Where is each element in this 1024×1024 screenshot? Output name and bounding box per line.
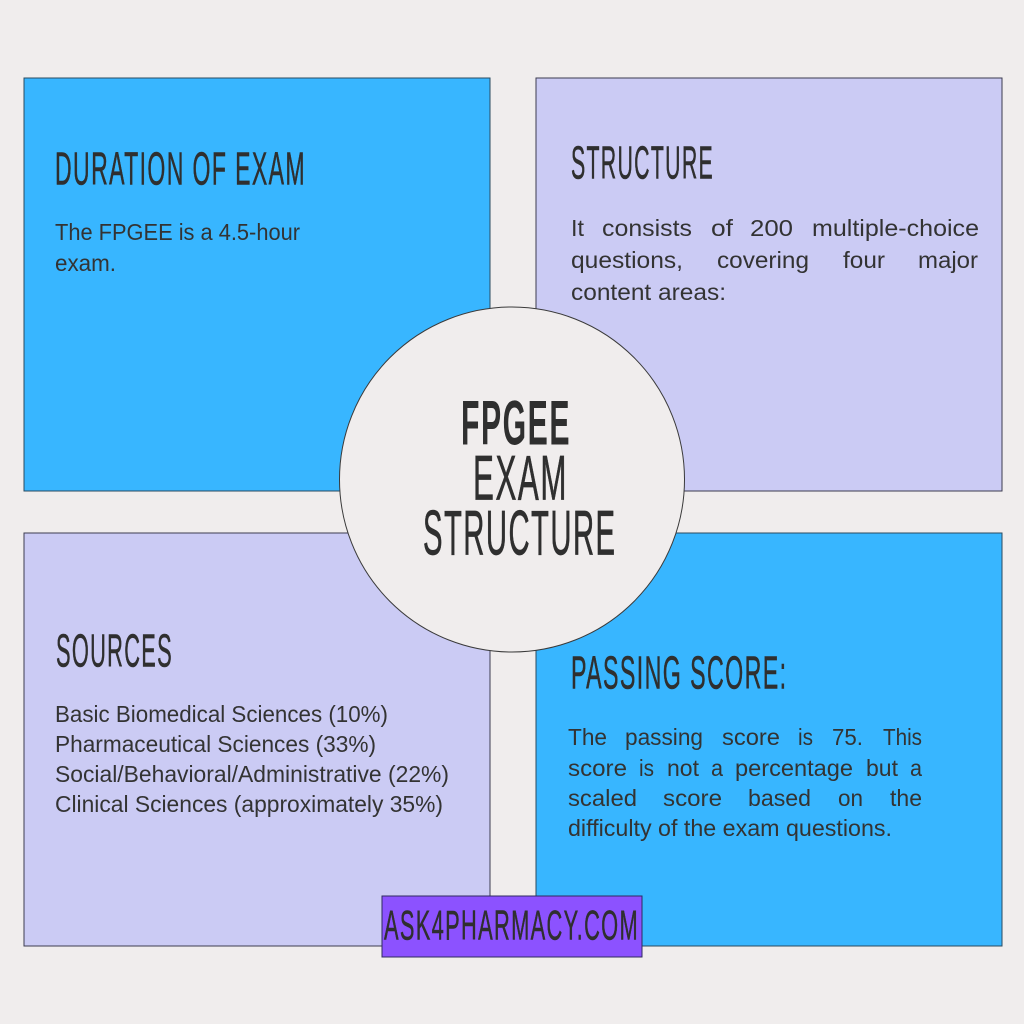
text: sources list: Basic Biomedical Sciences (10%) — [55, 701, 388, 727]
panel: duration of exam — [24, 78, 490, 491]
text: structure body: 200 — [750, 215, 793, 241]
text: passing score body: score — [722, 724, 780, 750]
text: passing score body: score — [568, 755, 627, 781]
text: structure body: questions, — [571, 247, 683, 273]
text: passing score body: not — [667, 755, 699, 781]
panel: passing score — [536, 533, 1002, 946]
text: passing score body: on — [838, 785, 863, 811]
text: passing score body: but — [866, 755, 898, 781]
text: passing score body: scaled — [568, 785, 637, 811]
central circle: STRUCTURE — [423, 498, 616, 568]
text: duration body — [55, 219, 300, 276]
text: structure body: It — [571, 215, 584, 241]
text: structure body: covering — [717, 247, 809, 273]
title: EXAM — [473, 444, 568, 514]
text: structure body: consists — [602, 215, 692, 241]
text: passing score body: difficulty of the exam questions. — [568, 815, 892, 841]
title: FPGEE — [461, 388, 571, 458]
text: sources list: Social/Behavioral/Administrative (22%) — [55, 761, 449, 787]
text: passing score body — [568, 724, 923, 841]
panel: structure: STRUCTURE — [571, 136, 714, 188]
text: sources list: Pharmaceutical Sciences (33%) — [55, 731, 376, 757]
text: duration body: The FPGEE is a 4.5-hour — [55, 219, 300, 245]
text: sources list — [55, 701, 449, 817]
text: passing score body: percentage — [735, 755, 853, 781]
panel: sources: SOURCES — [56, 624, 173, 676]
text: structure body: content areas: — [571, 279, 726, 305]
text: passing score body: This — [883, 724, 922, 750]
panel: sources — [24, 533, 490, 946]
text: passing score body: a — [711, 755, 724, 781]
heading: passing score: PASSING SCORE: — [571, 646, 788, 698]
text: passing score body: a — [910, 755, 923, 781]
heading: duration of exam: DURATION OF EXAM — [55, 142, 306, 194]
text: passing score body: the — [890, 785, 922, 811]
title — [423, 388, 616, 568]
text: passing score body: 75. — [832, 724, 863, 750]
text: structure body: of — [711, 215, 734, 241]
text: passing score body: is — [798, 724, 813, 750]
text: passing score body: is — [639, 755, 654, 781]
text: passing score body: score — [663, 785, 722, 811]
text: structure body: major — [918, 247, 978, 273]
panel: structure — [536, 78, 1002, 491]
text: structure body: multiple-choice — [812, 215, 979, 241]
text: structure body — [571, 215, 979, 305]
text: passing score body: based — [748, 785, 811, 811]
text: passing score body: The — [568, 724, 607, 750]
text: sources list: Clinical Sciences (approximately 35%) — [55, 791, 443, 817]
central circle — [340, 307, 684, 652]
website badge: ASK4PHARMACY.COM — [384, 902, 639, 948]
text: duration body: exam. — [55, 250, 116, 276]
website badge — [382, 896, 642, 957]
text: passing score body: passing — [625, 724, 703, 750]
text: structure body: four — [843, 247, 885, 273]
